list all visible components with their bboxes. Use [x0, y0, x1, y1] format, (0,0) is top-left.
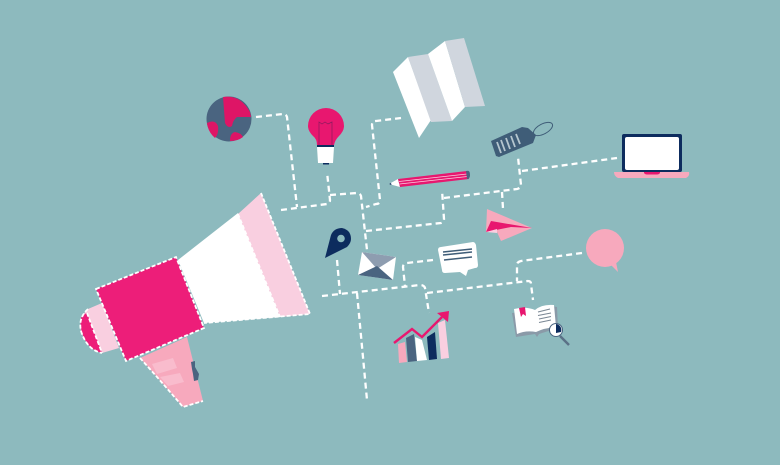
megaphone body — [96, 257, 204, 361]
icon: paper plane — [486, 209, 532, 241]
dashed connector network — [256, 114, 617, 400]
icon: pink speech bubble — [586, 229, 624, 272]
megaphone rear cap — [80, 303, 119, 353]
icon: folded map — [393, 38, 485, 138]
icon: map pin — [325, 228, 351, 258]
icon: globe — [206, 96, 252, 142]
icon: megaphone — [80, 193, 310, 407]
megaphone horn — [178, 193, 310, 323]
icon: pencil — [389, 171, 470, 187]
icon: speech card — [438, 242, 478, 276]
megaphone handle — [140, 337, 203, 407]
icon: envelope — [358, 252, 396, 280]
icon: price tag — [491, 120, 555, 157]
icon: growth chart — [394, 311, 449, 363]
icon: laptop — [614, 134, 689, 178]
icon: open book with magnifier — [512, 305, 569, 345]
icon: light bulb — [308, 108, 344, 164]
